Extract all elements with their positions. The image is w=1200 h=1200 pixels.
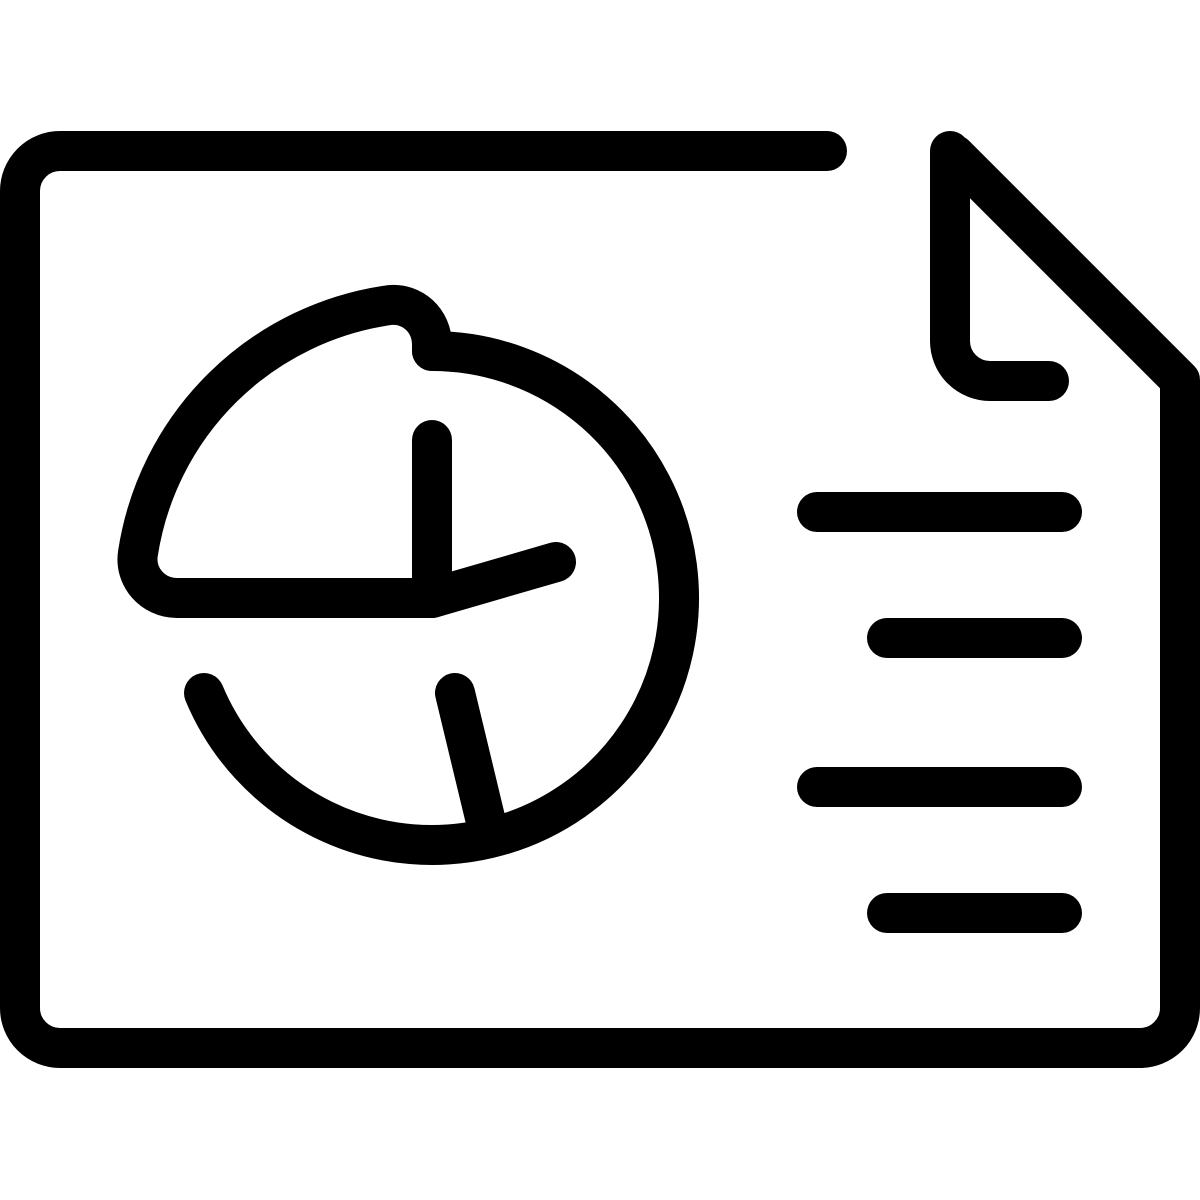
text lines (817, 512, 1062, 913)
document outline (20, 151, 1180, 1048)
pie slice (137, 305, 556, 598)
pie circle (204, 351, 679, 845)
lower divider (455, 693, 487, 826)
folded corner (950, 151, 1049, 381)
pie chart (137, 305, 679, 845)
slice divider (412, 440, 452, 598)
